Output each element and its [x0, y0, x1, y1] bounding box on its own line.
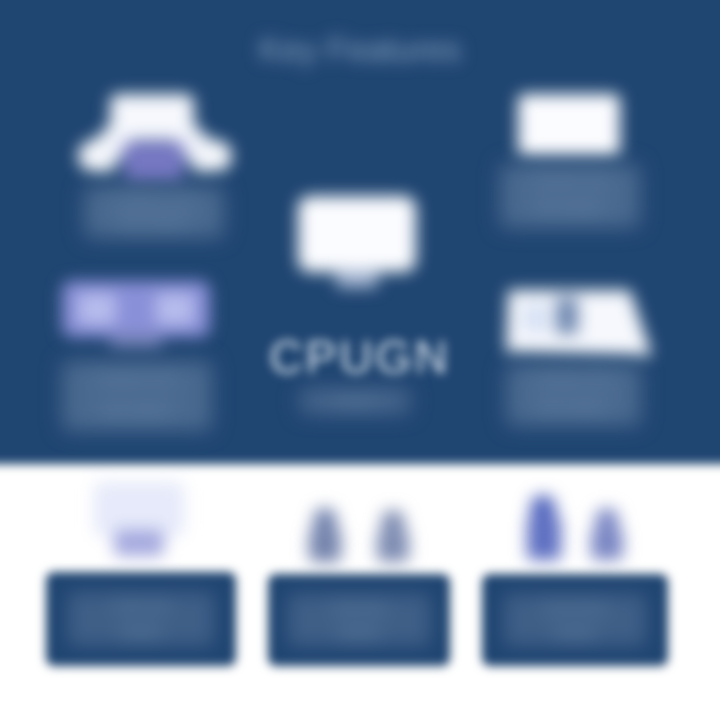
text: card centre — [288, 594, 430, 646]
text: feature 4 description: description — [101, 403, 173, 420]
feature 2: top right — [492, 81, 648, 236]
text: feature 5 description: description — [537, 400, 610, 417]
icon: monitor with side wings — [66, 81, 244, 188]
title: Key Features — [259, 31, 461, 69]
text: feature 5 description: Feature five — [534, 370, 613, 387]
icon: purple device group — [51, 270, 221, 357]
feature 1: top left — [66, 81, 244, 247]
text: card left — [68, 592, 214, 646]
text: feature 4 description: Feature four — [96, 369, 178, 386]
panel: bottom card right — [482, 574, 668, 666]
icon: central monitor — [285, 183, 429, 300]
text: card left: Card one — [112, 597, 170, 613]
text: feature 1 description — [84, 186, 224, 238]
text: card right — [504, 594, 646, 646]
feature 4: middle left — [51, 270, 221, 439]
icon: bottom-right figures — [514, 484, 634, 571]
feature 3: centre — [264, 183, 452, 422]
text: feature 2 description: description — [534, 200, 606, 217]
text: card centre: Card two — [331, 599, 387, 615]
panel: bottom card centre — [268, 574, 450, 666]
text: card right: details — [555, 625, 595, 641]
icon: screen — [518, 94, 620, 156]
text: card centre: details — [339, 625, 379, 641]
text: central caption: Caption — [331, 393, 379, 409]
icon: light panels — [494, 277, 662, 368]
icon: bottom-centre figures — [297, 498, 420, 572]
text: feature 1 description: description — [118, 215, 190, 232]
panel: bottom card left — [46, 572, 236, 666]
icon: white bottom-left device — [91, 478, 187, 566]
text: feature 5 description — [506, 364, 641, 426]
text: feature 2 description: Feature two — [530, 170, 610, 187]
text: feature 2 description — [500, 164, 640, 228]
feature 5: middle right — [494, 277, 662, 434]
text: central caption — [300, 388, 410, 414]
text: feature 4 description — [62, 361, 212, 431]
text: feature 1 description: Feature one — [114, 190, 194, 207]
text: card left: details — [121, 624, 161, 640]
text: card right: Card three — [542, 599, 608, 615]
text: central label: CPUGN — [269, 331, 451, 383]
panel: dark blue top section — [0, 0, 720, 464]
